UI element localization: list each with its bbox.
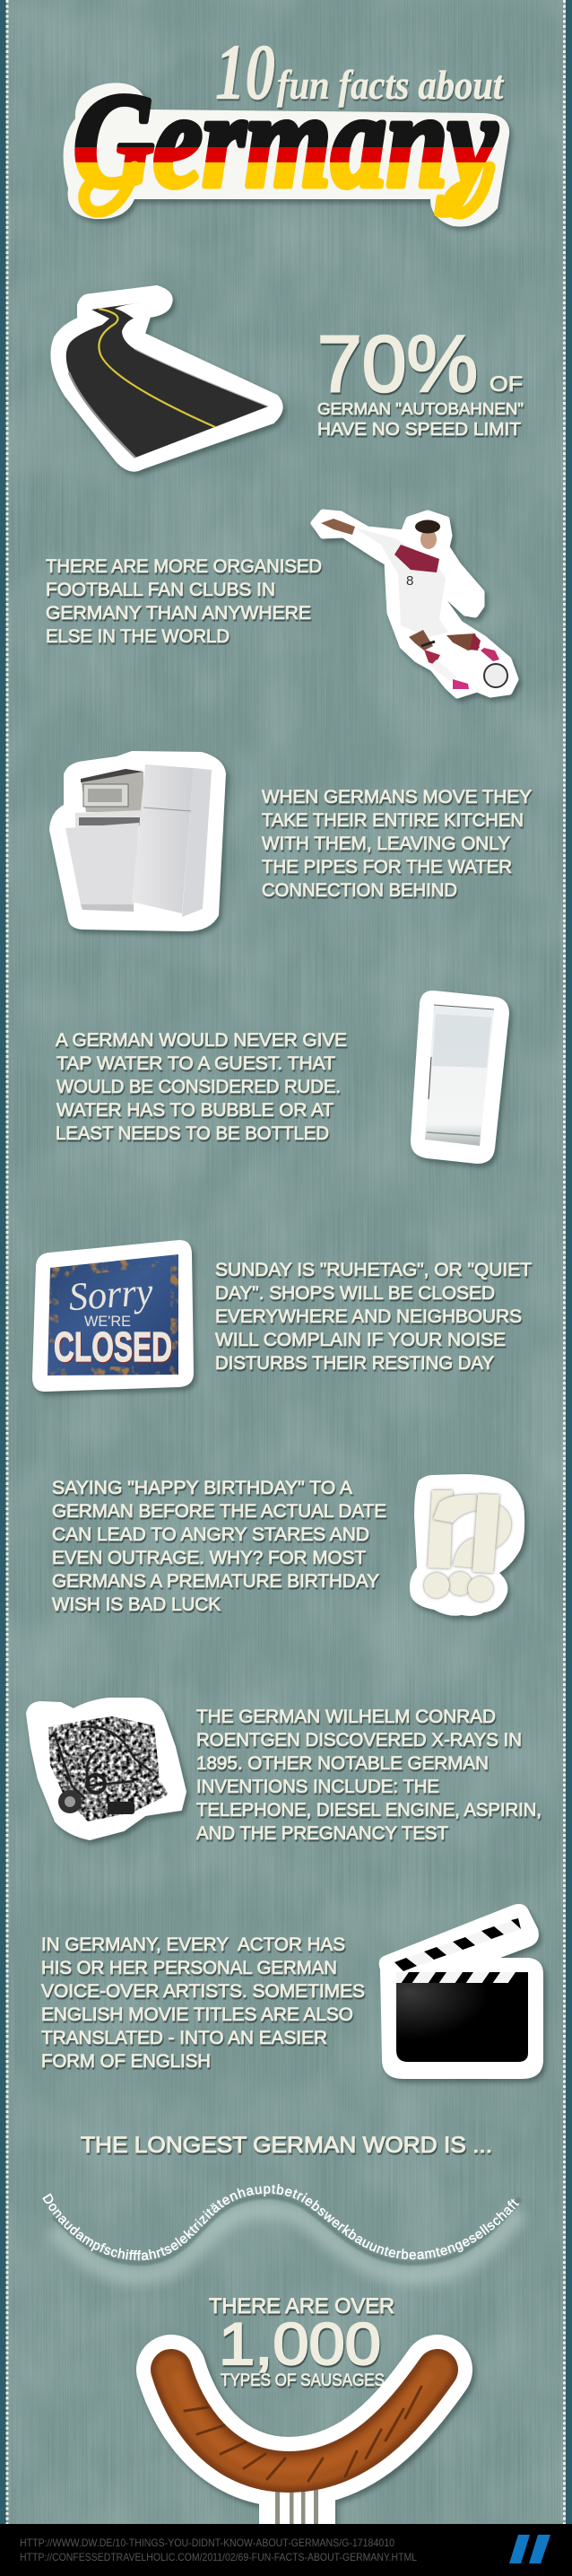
footer bar (0, 2524, 572, 2576)
fact 6: birthday text: EVEN OUTRAGE. WHY? FOR MOST (52, 1548, 366, 1568)
fact 6: birthday text (52, 1478, 386, 1615)
sausage heading text: THERE ARE OVER (209, 2294, 394, 2318)
footer sources: HTTP://CONFESSEDTRAVELHOLIC.COM/2011/02/69-FUN-FACTS-ABOUT-GERMANY.HTML (20, 2551, 417, 2563)
fact 2: football text: GERMANY THAN ANYWHERE (46, 603, 311, 624)
fact 1: 70 percent text: GERMAN "AUTOBAHNEN" (317, 400, 524, 418)
heading: longest German word: THE LONGEST GERMAN WORD IS ... (81, 2133, 492, 2158)
fact 3: kitchen text: THE PIPES FOR THE WATER (262, 857, 512, 878)
sausage heading text: 1,000 (219, 2310, 381, 2377)
fact 3: kitchen text: TAKE THEIR ENTIRE KITCHEN (262, 810, 524, 831)
icon: sorry we're closed sign sticker (32, 1240, 194, 1392)
fact 3: kitchen text: WITH THEM, LEAVING ONLY (262, 834, 510, 854)
longest word on a wave: Donaudampfschifffahrtselektrizitätenhauptbetriebswerkbauunterbeamtengesellschaft (42, 2184, 520, 2261)
fact 1: 70 percent text (317, 319, 524, 440)
fact 6: birthday text: CAN LEAD TO ANGRY STARES AND (52, 1524, 369, 1545)
fact 7: inventions text: 1895. OTHER NOTABLE GERMAN (196, 1753, 489, 1774)
footer sources: HTTP://WWW.DW.DE/10-THINGS-YOU-DIDNT-KNOW-ABOUT-GERMANS/G-17184010 (20, 2537, 394, 2549)
fact 6: birthday text: SAYING "HAPPY BIRTHDAY" TO A (52, 1478, 352, 1498)
fact 6: birthday text: WISH IS BAD LUCK (52, 1594, 221, 1615)
fact 1: 70 percent text: OF (490, 372, 523, 397)
icon: sorry we're closed sign sticker: WE'RE (84, 1313, 131, 1330)
fact 4: tap water text: WOULD BE CONSIDERED RUDE. (56, 1077, 341, 1097)
fact 5: ruhetag text: SUNDAY IS "RUHETAG", OR "QUIET (215, 1260, 532, 1280)
icon: football player sticker (314, 512, 516, 695)
fact 8: voice-over text: HIS OR HER PERSONAL GERMAN (41, 1958, 337, 1978)
fact 4: tap water text: LEAST NEEDS TO BE BOTTLED (56, 1123, 329, 1144)
fact 8: voice-over text: VOICE-OVER ARTISTS. SOMETIMES (41, 1981, 365, 2002)
icon: water glass sticker (411, 991, 509, 1164)
icon: kitchen appliances sticker (49, 751, 226, 931)
fact 8: voice-over text: TRANSLATED - INTO AN EASIER (41, 2028, 327, 2048)
fact 3: kitchen text: WHEN GERMANS MOVE THEY (262, 787, 532, 808)
fact 7: inventions text: INVENTIONS INCLUDE: THE (196, 1777, 439, 1797)
fact 2: football text: FOOTBALL FAN CLUBS IN (46, 580, 275, 600)
fact 2: football text (46, 556, 322, 647)
fact 7: inventions text: THE GERMAN WILHELM CONRAD (196, 1707, 496, 1727)
icon: question and exclamation mark sticker (410, 1474, 524, 1616)
fact 5: ruhetag text: DAY". SHOPS WILL BE CLOSED (215, 1283, 495, 1304)
fact 8: voice-over text: FORM OF ENGLISH (41, 2051, 211, 2072)
fact 7: inventions text (196, 1707, 542, 1844)
fact 8: voice-over text: IN GERMANY, EVERY ACTOR HAS (41, 1934, 345, 1955)
fact 7: inventions text: AND THE PREGNANCY TEST (196, 1823, 448, 1844)
fact 5: ruhetag text: EVERYWHERE AND NEIGHBOURS (215, 1306, 522, 1327)
fact 7: inventions text: ROENTGEN DISCOVERED X-RAYS IN (196, 1730, 522, 1751)
icon: road sticker (51, 286, 282, 471)
fact 3: kitchen text (262, 787, 532, 901)
fact 4: tap water text: TAP WATER TO A GUEST. THAT (56, 1053, 335, 1074)
title: 10 fun facts about: 10 (215, 29, 275, 117)
fact 3: kitchen text: CONNECTION BEHIND (262, 880, 457, 901)
fact 7: inventions text: TELEPHONE, DIESEL ENGINE, ASPIRIN, (196, 1800, 542, 1821)
sausage heading text (209, 2294, 394, 2390)
fact 8: voice-over text (41, 1934, 365, 2072)
fact 8: voice-over text: ENGLISH MOVIE TITLES ARE ALSO (41, 2004, 353, 2025)
icon: sorry we're closed sign sticker: CLOSED (54, 1323, 172, 1370)
icon: clapperboard sticker (379, 1904, 543, 2079)
icon: sorry we're closed sign sticker: Sorry (67, 1270, 155, 1319)
fact 1: 70 percent text: HAVE NO SPEED LIMIT (317, 420, 521, 440)
fact 6: birthday text: GERMANS A PREMATURE BIRTHDAY (52, 1571, 379, 1592)
title: 10 fun facts about (215, 29, 504, 117)
fact 6: birthday text: GERMAN BEFORE THE ACTUAL DATE (52, 1501, 386, 1522)
icon: football player sticker: 8 (406, 573, 413, 589)
wavy shading under word (54, 2196, 520, 2275)
icon: sausage on fork sticker (171, 2370, 438, 2530)
sausage heading text: TYPES OF SAUSAGES (221, 2371, 385, 2390)
fact 2: football text: THERE ARE MORE ORGANISED (46, 556, 322, 577)
fact 4: tap water text: WATER HAS TO BUBBLE OR AT (56, 1100, 334, 1121)
fact 4: tap water text (56, 1030, 347, 1144)
title: 10 fun facts about: fun facts about (277, 62, 504, 108)
fact 1: 70 percent text: 70% (317, 319, 478, 408)
footer sources (20, 2537, 417, 2563)
fact 5: ruhetag text: WILL COMPLAIN IF YOUR NOISE (215, 1330, 506, 1350)
icon: engine sticker (27, 1698, 186, 1839)
fact 5: ruhetag text (215, 1260, 532, 1374)
fact 4: tap water text: A GERMAN WOULD NEVER GIVE (56, 1030, 347, 1051)
fact 5: ruhetag text: DISTURBS THEIR RESTING DAY (215, 1353, 494, 1374)
logo: blue slashes (509, 2535, 550, 2563)
fact 2: football text: ELSE IN THE WORLD (46, 626, 230, 647)
